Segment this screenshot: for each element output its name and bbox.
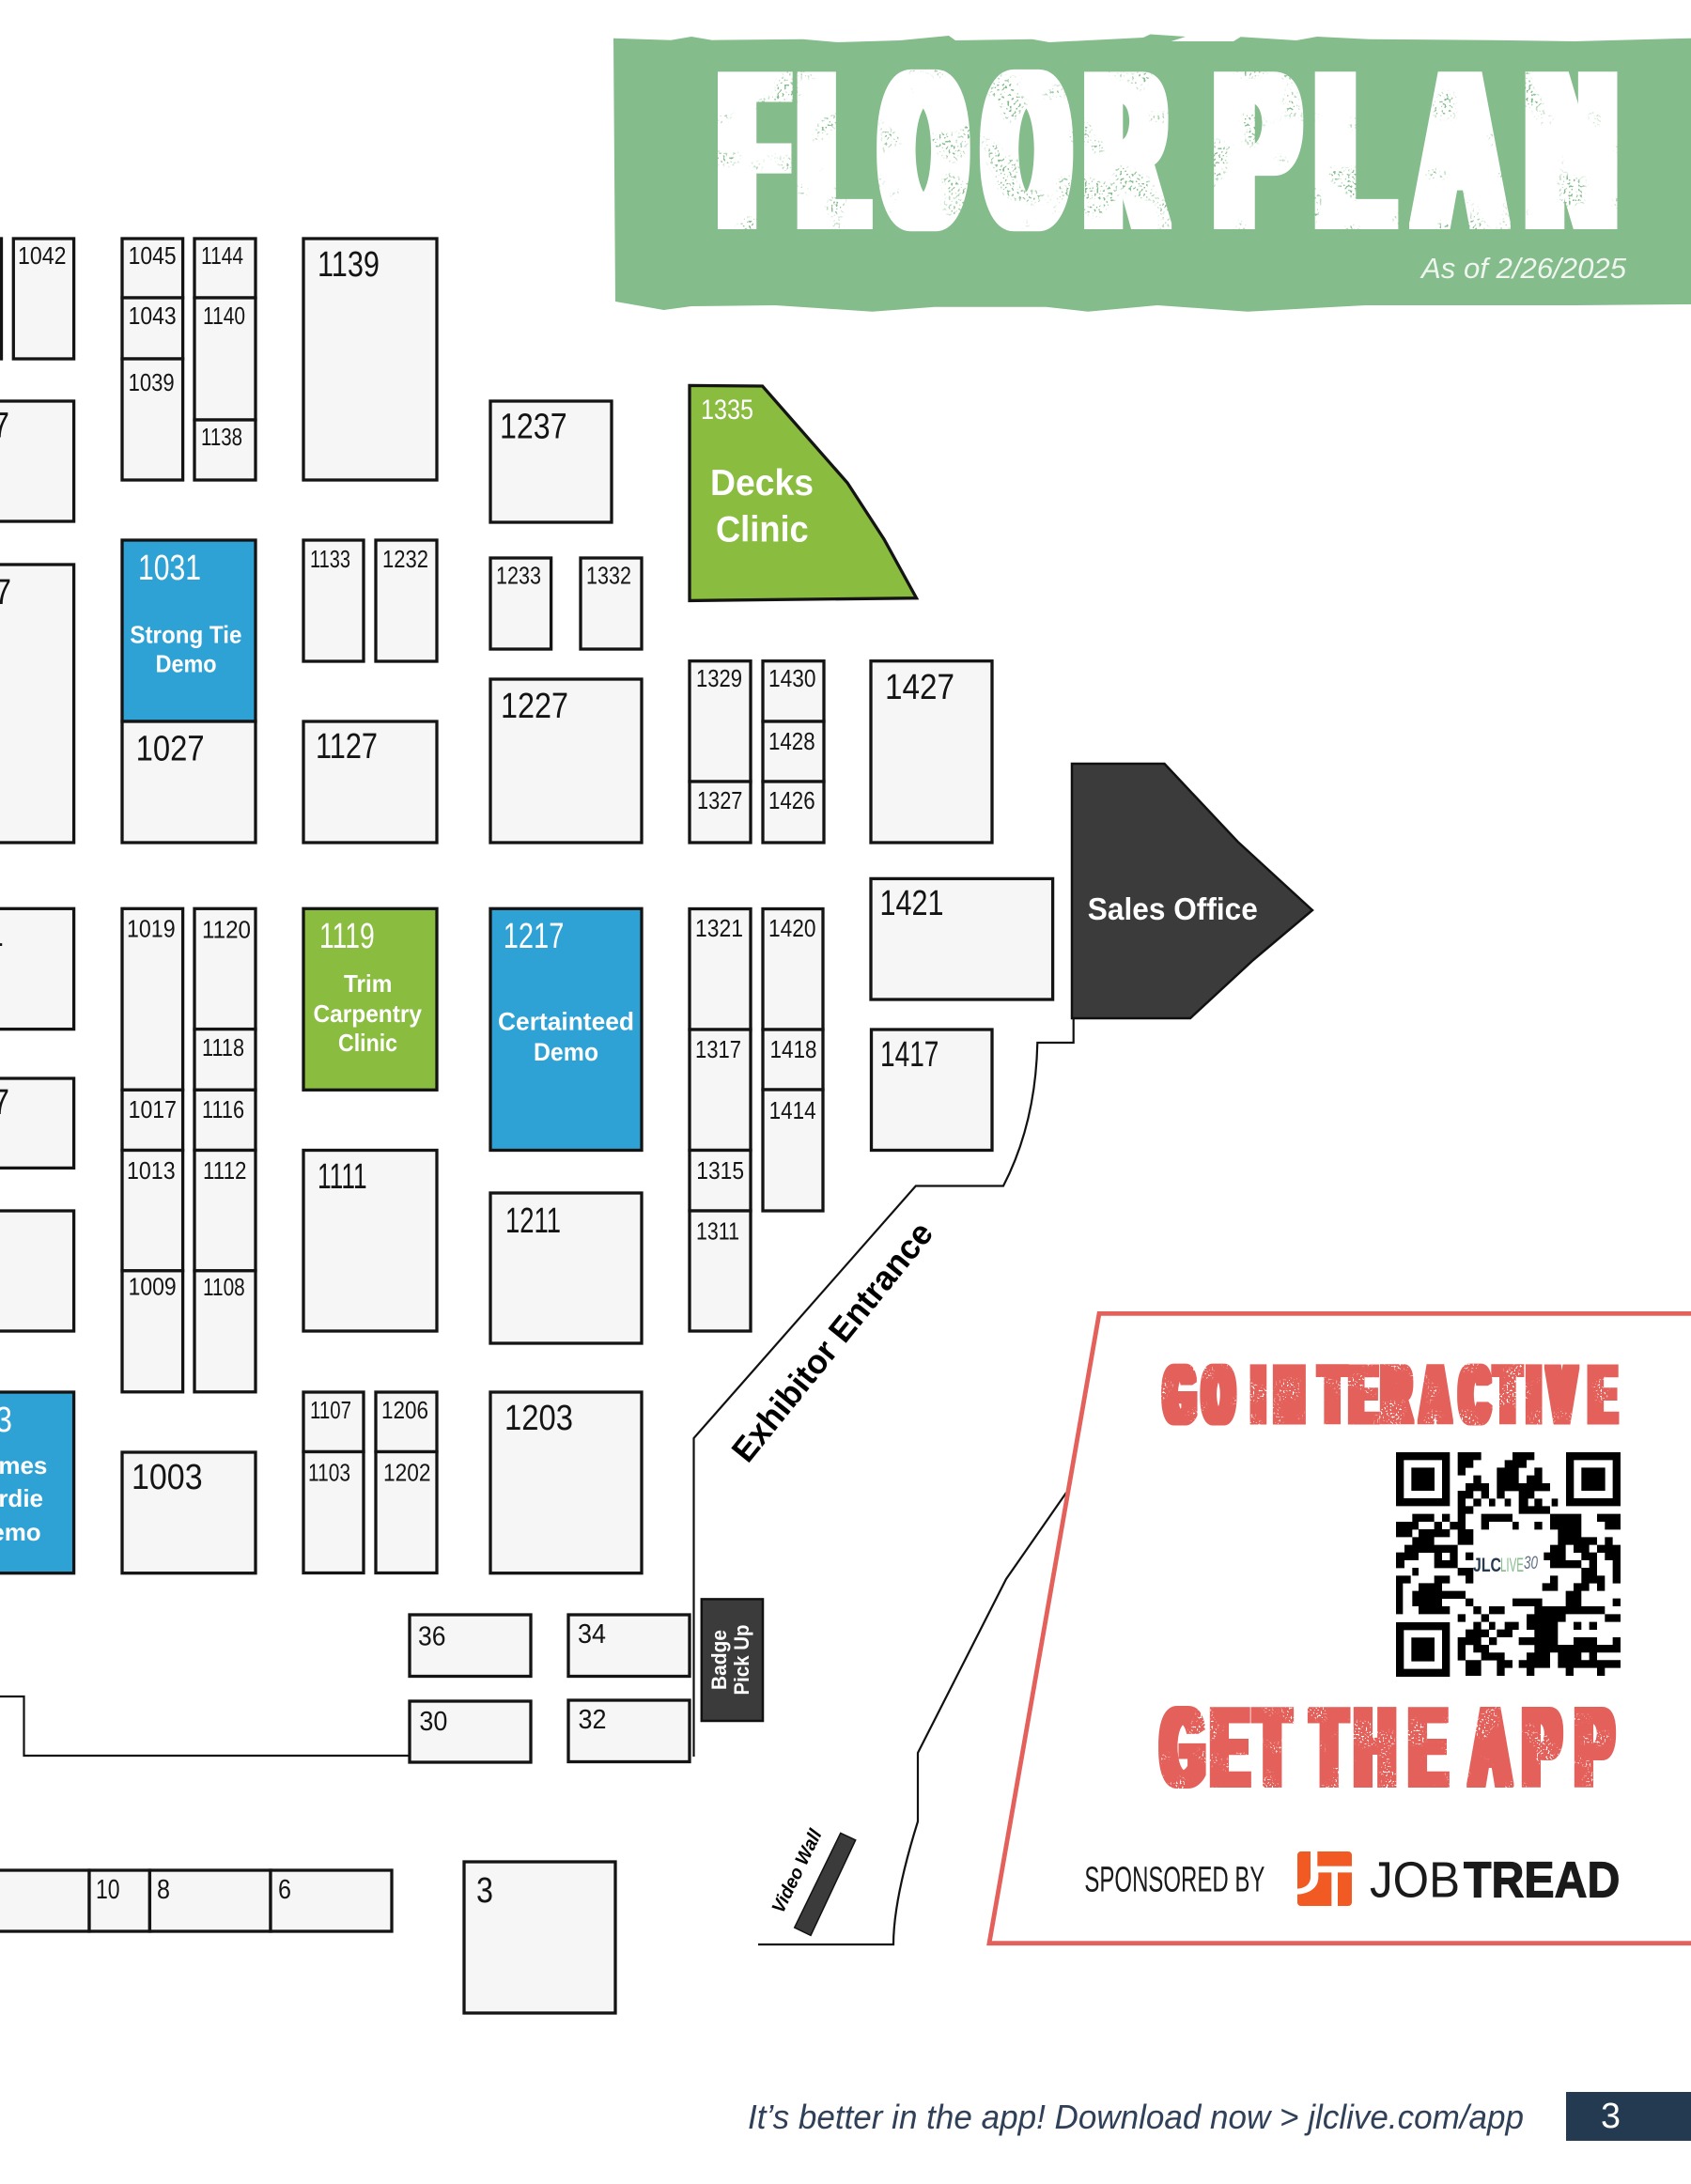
booth 1332: 1332 — [586, 562, 631, 590]
booth 3 — [464, 1862, 615, 2013]
booth 1045 — [122, 239, 183, 298]
booth 8: 8 — [157, 1875, 170, 1905]
booth 1202: 1202 — [383, 1459, 430, 1487]
video wall — [768, 1826, 856, 1935]
booth 1329: 1329 — [696, 664, 742, 692]
booth 1430: 1430 — [768, 664, 815, 692]
booth 1116 — [194, 1090, 256, 1150]
page number — [1566, 2092, 1691, 2141]
booth 1045: 1045 — [129, 241, 177, 270]
booth 1311: 1311 — [696, 1217, 739, 1246]
booth 10 — [89, 1870, 149, 1931]
booth 1003 — [122, 1452, 256, 1573]
booth 1206 — [376, 1392, 437, 1452]
booth 1043: 1043 — [129, 302, 177, 330]
booth 1127: 1127 — [316, 727, 378, 767]
booth 1116: 1116 — [202, 1095, 244, 1123]
booth 1112 — [194, 1150, 256, 1271]
booth 1335 Decks Clinic: Decks — [710, 463, 814, 503]
booth 36 — [410, 1615, 531, 1676]
booth 34: 34 — [578, 1619, 606, 1650]
booth 1414: 1414 — [769, 1096, 816, 1124]
heading: FLOOR PLAN — [723, 26, 1613, 273]
booth 1315 — [690, 1150, 751, 1211]
booth 30 — [410, 1701, 531, 1762]
booth 1140: 1140 — [203, 302, 245, 330]
booth 1118 — [194, 1030, 256, 1090]
booth 1317: 1317 — [695, 1035, 741, 1063]
booth 1417: 1417 — [880, 1035, 939, 1075]
booth 1329 — [690, 661, 751, 782]
JobTread wordmark: JOB — [1370, 1852, 1460, 1909]
booth: partial James Hardie Demo — [0, 1392, 74, 1573]
booth 1017: 1017 — [129, 1095, 177, 1123]
sales office: Sales Office — [1088, 891, 1258, 926]
booth: partial left upper — [0, 908, 74, 1030]
booth 1418 — [763, 1030, 823, 1090]
booth 32: 32 — [579, 1705, 607, 1735]
booth 1118: 1118 — [202, 1033, 244, 1061]
booth 1031 Strong Tie Demo: 1031 — [138, 549, 201, 588]
wall: exhibitor entrance outline — [693, 1018, 1074, 1757]
booth 1217 Certainteed Demo: Demo — [534, 1038, 598, 1066]
booth 1138 — [194, 420, 256, 480]
booth 1013 — [122, 1150, 183, 1271]
booth 1327 — [690, 782, 751, 843]
booth 1417 — [872, 1030, 992, 1150]
page number: 3 — [1601, 2097, 1621, 2136]
badge pick up — [702, 1599, 763, 1721]
label: Exhibitor Entrance: Exhibitor Entrance — [723, 1215, 940, 1469]
booth 1119 Trim Carpentry Clinic: Trim — [344, 969, 392, 998]
booth 6 — [271, 1870, 392, 1931]
booth 1119 Trim Carpentry Clinic — [303, 908, 437, 1090]
booth 1217 Certainteed Demo — [490, 908, 642, 1150]
QR centre logo: LIVE — [1500, 1555, 1524, 1576]
booth 1203 — [490, 1392, 642, 1573]
booth 1042: 1042 — [18, 241, 66, 270]
booth 1217 Certainteed Demo: 1217 — [504, 917, 564, 956]
booth 1335 Decks Clinic — [690, 385, 917, 600]
booth 1321 — [690, 909, 751, 1030]
booth 1003: 1003 — [132, 1458, 203, 1497]
booth 1211 — [490, 1193, 642, 1343]
booth 1202 — [376, 1452, 437, 1572]
booth 1039 — [122, 359, 183, 480]
booth 1428: 1428 — [768, 727, 815, 755]
booth 1043 — [122, 298, 183, 359]
booth 1107: 1107 — [310, 1396, 351, 1424]
booth 1039: 1039 — [129, 368, 175, 396]
icon: JobTread logo mark — [1297, 1851, 1352, 1906]
booth 1133: 1133 — [310, 545, 350, 573]
banner: torn green brush strip — [613, 34, 1691, 312]
booth 1426: 1426 — [768, 786, 815, 814]
booth 1211: 1211 — [505, 1201, 561, 1241]
booth 1335 Decks Clinic: Clinic — [716, 509, 809, 550]
booth 1140 — [194, 298, 256, 420]
booth 1133 — [303, 540, 364, 661]
badge pick up: Badge — [707, 1630, 731, 1690]
booth 10: 10 — [96, 1875, 120, 1905]
footer tagline: It’s better in the app! Download now > jlclive.com/app — [748, 2098, 1524, 2136]
sales office — [1072, 764, 1312, 1018]
heading: GO INTERACTIVE and GET THE APP — [1162, 1350, 1615, 1809]
booth 1019 — [122, 908, 183, 1090]
booth 1227 — [490, 679, 642, 843]
title banner — [613, 26, 1691, 312]
booth 1009: 1009 — [129, 1273, 177, 1301]
booth 1031 Strong Tie Demo: Strong Tie — [130, 620, 241, 648]
booth 1227: 1227 — [501, 687, 568, 726]
floor plan — [0, 239, 1312, 2013]
booth 1111 — [303, 1150, 437, 1331]
booth 1418: 1418 — [770, 1035, 817, 1063]
video wall: Video Wall — [768, 1826, 827, 1916]
JobTread wordmark bold: TREAD — [1464, 1852, 1620, 1909]
booth 1144: 1144 — [201, 241, 243, 270]
booth 1042 — [13, 239, 74, 359]
QR centre logo: JLC — [1473, 1555, 1501, 1576]
booth: partial left of 1042 — [0, 239, 2, 359]
QR centre logo — [1473, 1554, 1538, 1576]
booth 1421 — [871, 878, 1053, 999]
booth 1414 — [763, 1090, 823, 1211]
heading: FLOOR PLAN: FLOOR — [723, 26, 1161, 273]
booth 1237 — [490, 401, 612, 522]
booth 1421: 1421 — [879, 884, 943, 923]
booth 1108 — [194, 1271, 256, 1392]
booth 1019: 1019 — [127, 915, 176, 943]
heading: FLOOR PLAN: PLAN — [1218, 26, 1613, 273]
booth 1120: 1120 — [202, 916, 251, 944]
booth 1332 — [581, 558, 642, 649]
booth 1321: 1321 — [695, 914, 743, 942]
heading: GO INTERACTIVE and GET THE APP: GO INTERACTIVE — [1166, 1350, 1615, 1441]
booth 34 — [568, 1615, 690, 1676]
booth 1119 Trim Carpentry Clinic: Clinic — [338, 1029, 397, 1057]
booth 1233 — [490, 558, 551, 649]
badge pick up: Pick Up — [730, 1625, 753, 1695]
booth 1107 — [303, 1392, 364, 1452]
booth 1120 — [194, 908, 256, 1030]
booth 1311 — [690, 1211, 751, 1331]
booth 1027 — [122, 721, 256, 843]
booth 32 — [568, 1700, 690, 1762]
panel frame — [989, 1313, 1691, 1944]
booth 1206: 1206 — [381, 1396, 428, 1424]
booth 6: 6 — [278, 1875, 291, 1905]
booth: partial 7 tall — [0, 565, 74, 843]
booth 1427 — [871, 661, 992, 843]
booth 1009 — [122, 1271, 183, 1392]
booth 1112: 1112 — [203, 1156, 246, 1185]
booth 1031 Strong Tie Demo: Demo — [156, 650, 217, 678]
booth 1139: 1139 — [318, 245, 380, 285]
booth 1317 — [690, 1030, 751, 1150]
booth: partial 7 upper — [0, 401, 74, 521]
booth 1232 — [376, 540, 437, 661]
booth 1027: 1027 — [136, 729, 205, 768]
booth 1426 — [763, 782, 824, 843]
QR centre logo: 30 — [1524, 1554, 1538, 1573]
booth 1233: 1233 — [496, 562, 541, 590]
booth row: unnumbered left — [0, 1870, 89, 1931]
booth 1315: 1315 — [696, 1156, 744, 1185]
booth 1108: 1108 — [203, 1273, 245, 1301]
booth 1427: 1427 — [885, 668, 954, 707]
booth 1031 Strong Tie Demo — [122, 540, 256, 721]
sponsored by label: SPONSORED BY — [1084, 1861, 1264, 1900]
booth 1139 — [303, 239, 437, 480]
booth 36: 36 — [418, 1621, 445, 1651]
booth 1111: 1111 — [318, 1157, 367, 1197]
booth: partial left blank — [0, 1211, 74, 1331]
booth 1013: 1013 — [127, 1156, 176, 1185]
heading: GO INTERACTIVE and GET THE APP: GET THE APP — [1162, 1685, 1612, 1809]
booth 1127 — [303, 721, 437, 843]
booth 1144 — [194, 239, 256, 298]
booth 1420: 1420 — [768, 914, 815, 942]
booth 1217 Certainteed Demo: Certainteed — [498, 1008, 634, 1036]
booth 1237: 1237 — [500, 407, 567, 446]
booth 1335 Decks Clinic: 1335 — [701, 395, 753, 426]
booth 1119 Trim Carpentry Clinic: Carpentry — [314, 999, 422, 1028]
booth 1017 — [122, 1090, 183, 1150]
booth 1203: 1203 — [504, 1399, 573, 1438]
wall: lower left outline — [0, 1696, 410, 1756]
wall: lobby outline — [758, 1493, 1066, 1944]
QR code — [1396, 1452, 1621, 1677]
booth 1232: 1232 — [382, 545, 428, 573]
booth 1420 — [763, 909, 823, 1030]
booth 1430 — [763, 661, 824, 721]
booth 3: 3 — [476, 1871, 493, 1911]
booth 1103: 1103 — [308, 1459, 350, 1487]
booth 1138: 1138 — [201, 423, 242, 451]
booth 30: 30 — [419, 1707, 447, 1737]
booth 1119 Trim Carpentry Clinic: 1119 — [319, 917, 375, 956]
panel: go interactive app callout — [989, 1313, 1691, 1944]
booth 1327: 1327 — [697, 786, 742, 814]
booth 1428 — [763, 721, 824, 782]
booth 1103 — [303, 1452, 364, 1572]
booth: partial left 7 — [0, 1078, 74, 1168]
booth 8 — [149, 1870, 271, 1931]
date note: As of 2/26/2025 — [1420, 252, 1627, 285]
